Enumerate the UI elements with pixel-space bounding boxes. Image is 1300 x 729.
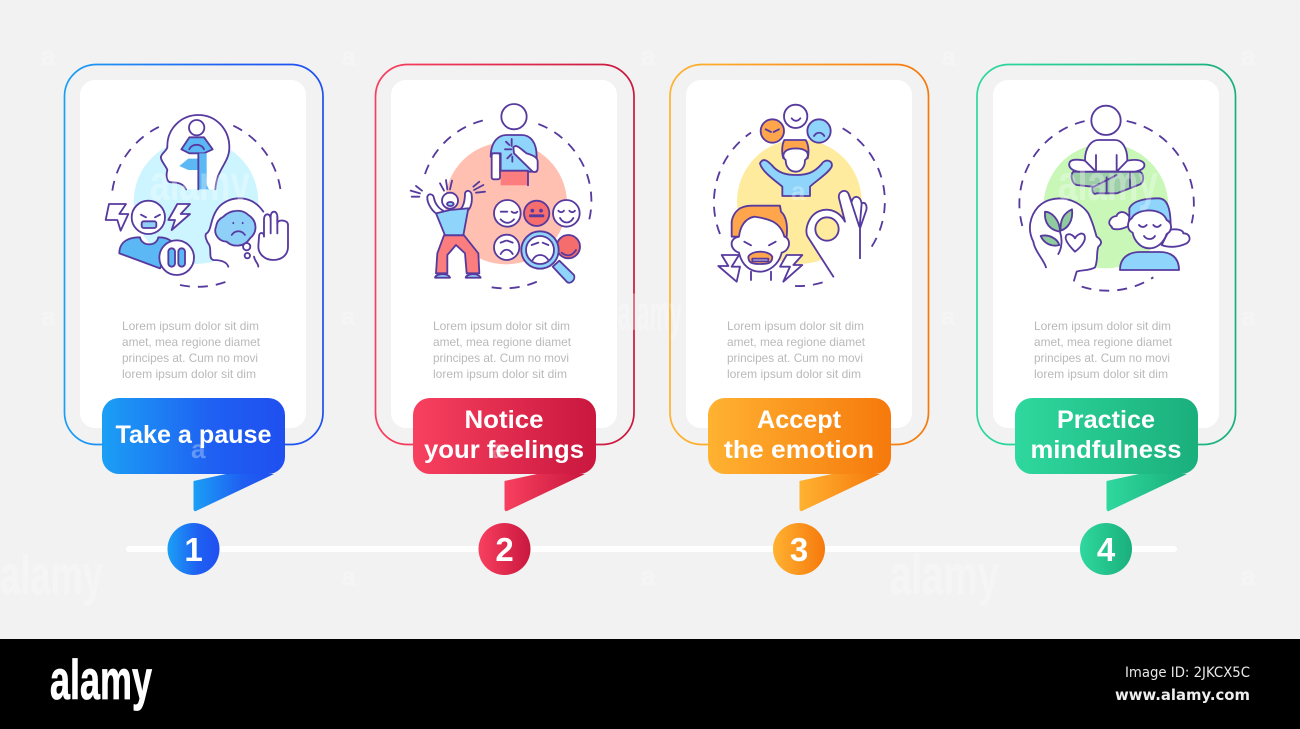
text block: amet, mea regione diamet <box>433 335 572 349</box>
text block: amet, mea regione diamet <box>122 335 261 349</box>
watermarks <box>0 41 1256 606</box>
text block: principes at. Cum no movi <box>727 351 863 365</box>
watermarks: a <box>1241 41 1256 71</box>
text block <box>122 319 261 381</box>
step number <box>168 523 220 575</box>
step number <box>478 523 530 575</box>
watermarks: a <box>341 301 356 331</box>
step number <box>1080 523 1132 575</box>
text block: lorem ipsum dolor sit dim <box>727 367 861 381</box>
panel: notice your feelings <box>376 64 634 575</box>
panel: take a pause <box>64 64 323 575</box>
text block: amet, mea regione diamet <box>727 335 866 349</box>
heading label: mindfulness <box>1030 436 1182 464</box>
step number <box>773 523 825 575</box>
heading label: Accept <box>757 406 842 434</box>
panel: accept the emotion <box>670 64 928 575</box>
watermarks: a <box>41 301 56 331</box>
heading label: your feelings <box>424 436 584 464</box>
text block: lorem ipsum dolor sit dim <box>433 367 567 381</box>
watermarks: a <box>641 561 656 591</box>
heading label: Take a pause <box>116 421 272 449</box>
text block: amet, mea regione diamet <box>1034 335 1173 349</box>
watermarks: a <box>1241 561 1256 591</box>
step number: 3 <box>790 531 808 568</box>
footer url: www.alamy.com <box>1115 686 1250 704</box>
step number: 4 <box>1097 531 1116 568</box>
footer bar <box>0 639 1300 729</box>
footer logo: alamy <box>50 648 152 711</box>
watermarks: alamy <box>150 155 250 211</box>
text block: principes at. Cum no movi <box>433 351 569 365</box>
text block: lorem ipsum dolor sit dim <box>122 367 256 381</box>
heading label <box>1015 398 1198 511</box>
text block <box>1034 319 1173 381</box>
panel: practice mindfulness <box>977 64 1236 575</box>
watermarks: a <box>341 41 356 71</box>
text block: Lorem ipsum dolor sit dim <box>1034 319 1171 333</box>
heading label: Practice <box>1057 406 1155 434</box>
watermarks: alamy <box>1058 155 1158 211</box>
icon: take a pause illustration <box>106 115 288 287</box>
text block: Lorem ipsum dolor sit dim <box>122 319 259 333</box>
step number: 1 <box>184 531 203 568</box>
watermarks: a <box>341 561 356 591</box>
timeline line <box>126 546 1177 552</box>
icon: accept the emotion illustration <box>714 105 885 286</box>
step number: 2 <box>495 531 514 568</box>
heading label <box>102 398 285 511</box>
heading label: Notice <box>464 406 544 434</box>
text block <box>727 319 866 381</box>
watermarks: alamy <box>618 285 682 341</box>
heading label <box>708 398 891 511</box>
watermarks: a <box>41 41 56 71</box>
watermarks: a <box>941 301 956 331</box>
text block: Lorem ipsum dolor sit dim <box>727 319 864 333</box>
footer image id: Image ID: 2JKCX5C <box>1125 665 1250 681</box>
watermarks: a <box>641 41 656 71</box>
text block: principes at. Cum no movi <box>122 351 258 365</box>
text block: Lorem ipsum dolor sit dim <box>433 319 570 333</box>
watermarks: a <box>491 434 506 464</box>
icon: notice your feelings illustration <box>411 104 591 288</box>
watermarks: alamy <box>890 543 999 606</box>
icon: practice mindfulness illustration <box>1019 106 1194 291</box>
watermarks: a <box>191 434 206 464</box>
watermarks: a <box>1241 301 1256 331</box>
text block: lorem ipsum dolor sit dim <box>1034 367 1168 381</box>
text block <box>433 319 572 381</box>
text block: principes at. Cum no movi <box>1034 351 1170 365</box>
watermarks: a <box>941 41 956 71</box>
heading label: the emotion <box>724 436 874 464</box>
watermarks: a <box>791 176 806 206</box>
heading label <box>413 398 596 511</box>
watermarks: alamy <box>0 543 103 606</box>
